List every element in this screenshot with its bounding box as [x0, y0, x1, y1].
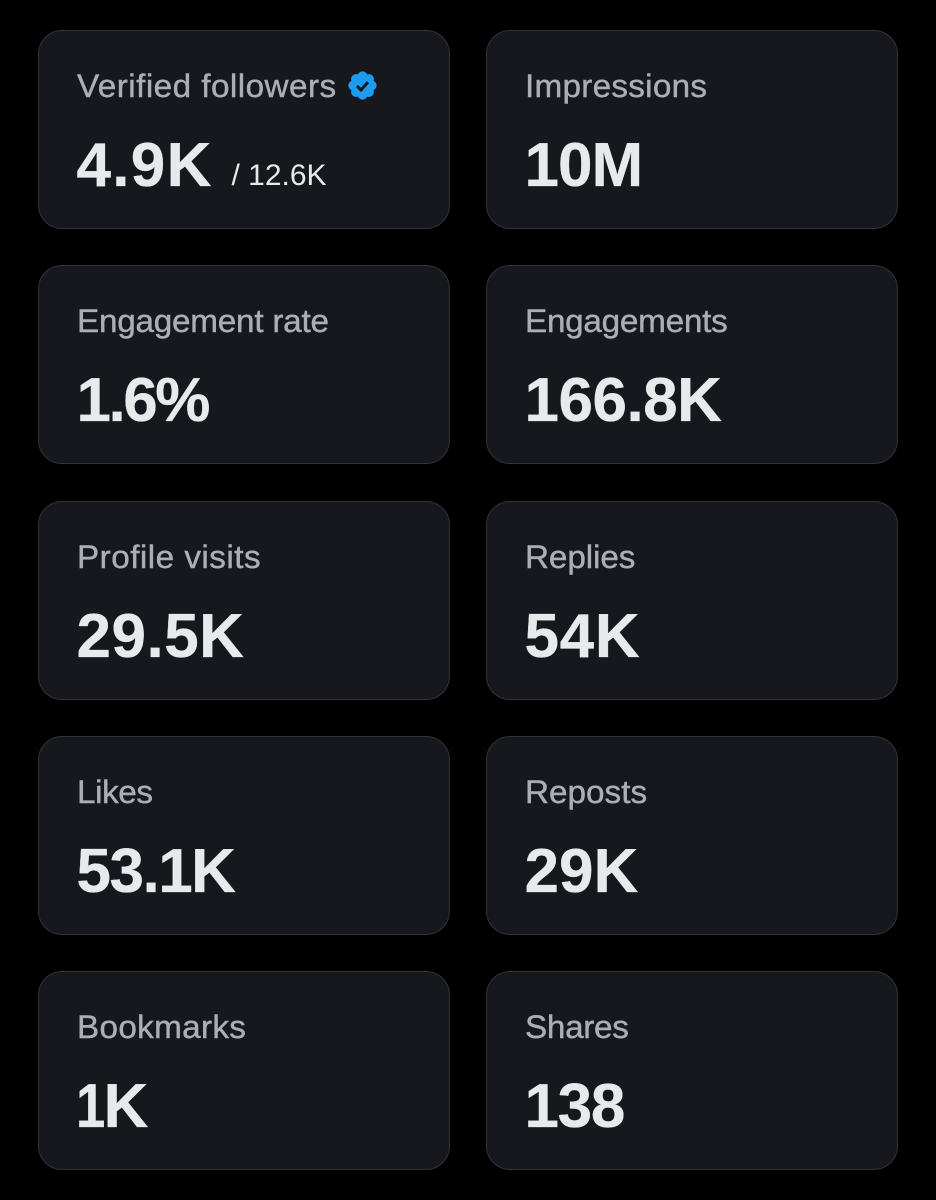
panel: replies: [486, 501, 898, 700]
value: 1K: K: [103, 1072, 148, 1141]
label: engagements: Engagements: [524, 303, 727, 339]
value: 29K: 29K: [524, 837, 638, 906]
panel: impressions: [486, 30, 898, 229]
icon: verified badge: [348, 71, 377, 100]
label: reposts: Reposts: [524, 774, 647, 810]
label: replies: Replies: [524, 539, 635, 575]
panel: profile visits: [38, 501, 450, 700]
value: 10M: 10M: [524, 131, 642, 200]
value: 1K: [76, 1072, 148, 1141]
label: profile visits: Profile visits: [76, 539, 261, 575]
panel: verified followers: [38, 30, 450, 229]
panel: likes: [38, 736, 450, 935]
label: bookmarks: Bookmarks: [76, 1009, 246, 1045]
label: impressions: Impressions: [524, 68, 707, 104]
panel: engagements: [486, 265, 898, 464]
value: 1K: 1: [76, 1072, 99, 1141]
value: 138: 138: [524, 1072, 624, 1141]
value: 54K: 54K: [524, 602, 640, 671]
panel: reposts: [486, 736, 898, 935]
panel: engagement rate: [38, 265, 450, 464]
value: 1.6%: 1.6%: [76, 366, 208, 435]
label: verified followers: Verified followers: [76, 68, 336, 104]
panel: bookmarks: [38, 971, 450, 1170]
value: 29.5K: 29.5K: [76, 602, 244, 671]
value: 53.1K: 53.1K: [76, 837, 234, 906]
value: 166.8K: 166.8K: [524, 366, 721, 435]
label: engagement rate: Engagement rate: [76, 303, 328, 339]
value: total verified: / 12.6K: [232, 159, 327, 192]
panel: shares: [486, 971, 898, 1170]
label: likes: Likes: [76, 774, 152, 810]
value: 4.9K: 4.9K: [76, 131, 213, 200]
label: shares: Shares: [524, 1009, 628, 1045]
